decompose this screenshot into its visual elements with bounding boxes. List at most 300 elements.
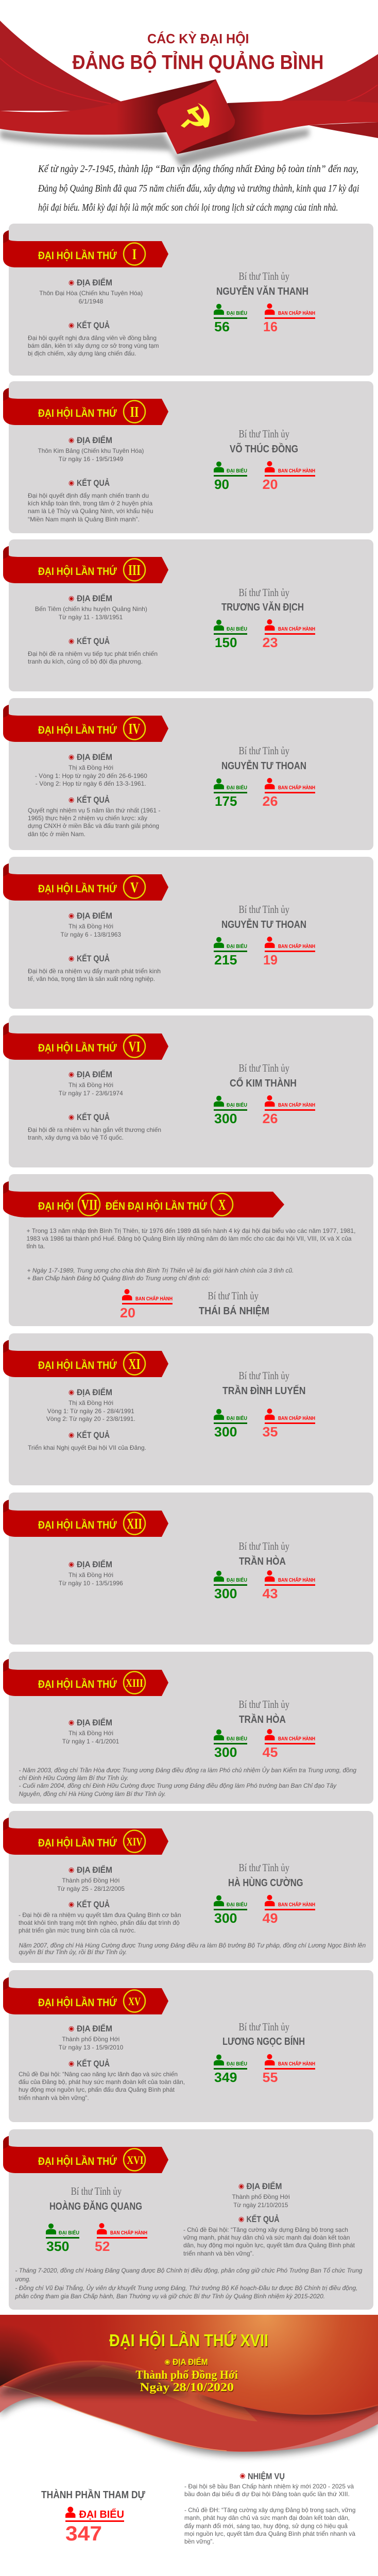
location [59, 1560, 123, 1587]
result [28, 954, 161, 982]
secretary: CỔ KIM THÀNH [230, 1077, 297, 1089]
location: Từ ngày 6 - 13/8/1963 [61, 931, 121, 938]
result: dân, huy động mọi nguồn lực, quyết tâm đưa Quảng Bình phát [183, 2242, 355, 2249]
location [35, 752, 147, 787]
result [28, 478, 153, 523]
result: kích khắp toàn tỉnh, trọng tâm ở 2 huyện phía [28, 499, 152, 507]
secretary [230, 428, 298, 455]
result: KẾT QUẢ [77, 320, 110, 330]
result: dựng CNXH ở miền Bắc và đấu tranh giải phóng [28, 822, 159, 829]
ribbon heading: II [130, 404, 139, 420]
location: ĐỊA ĐIỂM [77, 435, 112, 445]
tasks text: bền vững”. [184, 2538, 214, 2545]
heading: đại hội XVII [109, 2330, 268, 2394]
ribbon heading: ĐẠI HỘI LẦN THỨ [38, 1996, 117, 2009]
result: đấu của Đảng bộ, phát huy sức mạnh đoàn kết của toàn dân, [19, 2078, 185, 2086]
delegate stats: 90 [214, 477, 229, 492]
location: ĐỊA ĐIỂM [77, 1718, 112, 1727]
delegate stats: 26 [263, 1111, 278, 1126]
result: KẾT QUẢ [77, 1430, 110, 1440]
italic note: ương. [15, 2276, 31, 2283]
ribbon heading: ĐẠI HỘI [38, 1200, 74, 1212]
ribbon heading: ĐẠI HỘI LẦN THỨ [38, 1678, 117, 1690]
location: ĐỊA ĐIỂM [77, 1560, 112, 1569]
ribbon heading [3, 2136, 168, 2173]
result [28, 1112, 161, 1141]
italic note: chí Đinh Hữu Cường làm Bí thư Tỉnh ủy. [19, 1774, 129, 1782]
italic note: Năm 2007, đồng chí Hà Hùng Cường được Trung ương Đảng điều ra làm Bộ trưởng Bộ Tư pháp, đồng chí Lương Ngọc Bính lên [19, 1942, 366, 1949]
delegate stats: 43 [263, 1586, 278, 1601]
ribbon heading [3, 1023, 168, 1060]
location: Thị xã Đồng Hới [68, 1571, 113, 1579]
secretary [49, 2185, 142, 2212]
result [19, 2059, 185, 2102]
location: Từ ngày 25 - 28/12/2005 [57, 1885, 125, 1892]
delegate stats [214, 303, 315, 334]
delegate stats: ĐẠI BIỂU [227, 467, 247, 474]
result: KẾT QUẢ [77, 795, 110, 805]
attendees stat: THÀNH PHẦN THAM DỰ [41, 2489, 145, 2501]
ribbon heading [3, 1340, 168, 1377]
secretary: THÁI BÁ NHIỆM [199, 1304, 269, 1317]
location: Từ ngày 21/10/2015 [233, 2201, 288, 2209]
secretary [221, 586, 304, 613]
ribbon heading: ĐẾN ĐẠI HỘI LẦN THỨ [106, 1200, 207, 1212]
header ribbon with party emblem [0, 21, 378, 166]
secretary: TRẦN HÒA [239, 1713, 286, 1725]
panel: đại hội V [3, 857, 373, 1009]
delegate stats: ĐẠI BIỂU [227, 1577, 247, 1583]
location [57, 1865, 125, 1892]
delegate stats: 300 [214, 1586, 237, 1601]
secretary: HÀ HÙNG CƯỜNG [228, 1876, 303, 1889]
panel: đại hội IV [3, 698, 373, 850]
delegate stats: 35 [263, 1424, 278, 1439]
delegate stats: 19 [263, 952, 278, 968]
secretary: TRẦN HÒA [239, 1555, 286, 1567]
result: Đại hội đề ra nhiệm vụ tiếp tục phát triển chiến [28, 650, 158, 657]
delegate stats [214, 1895, 315, 1926]
ribbon heading: ĐẠI HỘI LẦN THỨ [38, 1519, 117, 1531]
result: KẾT QUẢ [77, 2059, 110, 2069]
location: Vòng 1: Từ ngày 26 - 28/4/1991 [47, 1408, 134, 1415]
ribbon heading: XIII [126, 1676, 143, 1689]
delegate stats: BAN CHẤP HÀNH [278, 2060, 315, 2067]
delegate stats [214, 1729, 315, 1760]
delegate stats: ĐẠI BIỂU [227, 1735, 247, 1742]
ribbon heading: ĐẠI HỘI LẦN THỨ [38, 883, 117, 895]
italic note: quyền Bí thư Tỉnh ủy, rồi Bí thư Tỉnh ủy. [19, 1948, 127, 1956]
location: ĐỊA ĐIỂM [77, 752, 112, 762]
italic note: - Cuối năm 2004, đồng chí Đinh Hữu Cường được Trung ương Đảng điều động làm Phó trưởng ban Ban Chỉ đạo Tây [19, 1782, 337, 1789]
location: ĐỊA ĐIỂM [77, 1865, 112, 1875]
panel: đại hội II [3, 381, 373, 533]
intro text [38, 163, 359, 213]
note text [27, 1227, 355, 1250]
location [38, 435, 144, 463]
location: Thành phố Đồng Hới [62, 1877, 119, 1884]
delegate stats: BAN CHẤP HÀNH [110, 2229, 147, 2236]
location: Thành phố Đồng Hới [232, 2193, 290, 2200]
result: - Đại hội đề ra nhiệm vụ quyết tâm đưa Quảng Bình cơ bản [19, 1911, 181, 1919]
secretary: LƯƠNG NGỌC BÍNH [222, 2036, 305, 2047]
delegate stats: BAN CHẤP HÀNH [278, 310, 315, 316]
result: triển nhanh và bền vững”. [183, 2250, 254, 2257]
ribbon heading [3, 546, 168, 583]
panel: đại hội XI [3, 1333, 373, 1485]
secretary: NGUYỄN TƯ THOAN [221, 919, 306, 930]
result: triển nhanh và bền vững”. [19, 2094, 89, 2102]
italic note: - Năm 2003, đồng chí Trần Hòa được Trung ương Đảng điều động ra làm Phó chủ nhiệm Ủy ban Kiểm tra Trung ương, đồng [19, 1766, 356, 1774]
ribbon heading [3, 863, 168, 901]
delegate stats: BAN CHẤP HÀNH [278, 784, 315, 791]
result: KẾT QUẢ [77, 954, 110, 963]
ribbon heading: XV [128, 1995, 141, 2008]
italic note: + Ban Chấp hành Đảng bộ Quảng Bình do Trung ương chỉ định có: [27, 1275, 210, 1282]
delegate stats [214, 1095, 315, 1126]
delegate stats: BAN CHẤP HÀNH [278, 1577, 315, 1583]
ribbon heading: XVI [127, 2154, 143, 2166]
ribbon heading [3, 1977, 168, 2014]
note text: + Trong 13 năm nhập tỉnh Bình Trị Thiên, từ 1976 đến 1989 đã tiến hành 4 kỳ đại hội đại biểu vào các năm 1977, 1981, [27, 1227, 355, 1234]
result: tranh, xây dựng và bảo vệ Tổ quốc. [28, 1134, 124, 1141]
executive committee stat: BAN CHẤP HÀNH [135, 1295, 173, 1302]
heading: đại hội XVII: Thành phố Đồng Hới [136, 2368, 238, 2381]
secretary [199, 1290, 269, 1317]
result: phát triển gần mức trung bình của cả nước. [19, 1927, 136, 1934]
location [62, 1718, 119, 1745]
location: Thị xã Đồng Hới [68, 923, 113, 930]
delegate stats: ĐẠI BIỂU [227, 2060, 247, 2067]
tasks text: bầu đoàn đại biểu đi dự Đại hội Đảng toàn quốc lần thứ XIII. [184, 2490, 350, 2498]
location: Từ ngày 11 - 13/8/1951 [59, 614, 123, 621]
result [28, 636, 158, 665]
executive committee stat: 20 [120, 1305, 135, 1320]
secretary: Bí thư Tỉnh ủy [239, 2021, 289, 2033]
delegate stats: 45 [263, 1744, 278, 1760]
secretary [222, 2021, 305, 2047]
delegate stats: BAN CHẤP HÀNH [278, 1901, 315, 1908]
delegate stats: ĐẠI BIỂU [227, 310, 247, 316]
location [46, 1387, 135, 1422]
ribbon heading [3, 1500, 168, 1537]
secretary: Bí thư Tỉnh ủy [239, 428, 289, 440]
result: - Chủ đề Đại hội: “Tăng cường xây dựng Đảng bộ trong sạch [183, 2226, 348, 2233]
location: 6/1/1948 [79, 298, 104, 305]
location: ĐỊA ĐIỂM [77, 278, 112, 287]
secretary: Bí thư Tỉnh ủy [239, 1540, 289, 1552]
result: “Miền Nam mạnh là Quảng Bình mạnh”. [28, 516, 140, 523]
delegate stats: 300 [214, 1111, 237, 1126]
delegate stats: 349 [214, 2070, 237, 2085]
ribbon heading: ĐẠI HỘI LẦN THỨ [38, 2155, 117, 2167]
location: Thôn Đại Hòa (Chiến khu Tuyên Hóa) [39, 290, 143, 297]
result [28, 320, 159, 357]
delegate stats: 55 [263, 2070, 278, 2085]
italic note: phân công tham gia Ban Chấp hành, Ban Thường vụ và giữ chức Bí thư Tỉnh ủy Quảng Bình nhiệm kỳ 2015-2020. [15, 2293, 325, 2300]
panel: đại hội XII [3, 1493, 373, 1645]
ribbon heading [3, 388, 168, 425]
delegate stats: ĐẠI BIỂU [227, 943, 247, 950]
location: Từ ngày 10 - 13/5/1996 [59, 1580, 123, 1587]
tasks text: - Chủ đề ĐH: “Tăng cường xây dựng Đảng bộ trong sạch, vững [184, 2506, 355, 2514]
delegate stats: 150 [215, 635, 237, 650]
secretary: TRƯƠNG VĂN ĐỊCH [221, 601, 304, 613]
location: Từ ngày 17 - 23/6/1974 [59, 1090, 123, 1097]
result: bám dân, kiên trì xây dựng cơ sở trong vùng tạm [28, 342, 159, 349]
panel: đại hội XVI [3, 2129, 373, 2310]
secretary [221, 744, 306, 772]
ribbon heading [3, 230, 168, 267]
delegate stats [46, 2223, 147, 2254]
tasks text [184, 2471, 355, 2545]
delegate stats: ĐẠI BIỂU [227, 1415, 247, 1421]
location: Bến Tiêm (chiến khu huyện Quảng Ninh) [35, 605, 147, 613]
ribbon heading: ĐẠI HỘI LẦN THỨ [38, 724, 117, 736]
delegate stats: ĐẠI BIỂU [227, 625, 247, 632]
italic note: - Tháng 7-2020, đồng chí Hoàng Đăng Quang được Bộ Chính trị điều động, phân công giữ chức Phó Trưởng Ban Tổ chức Trung [15, 2267, 363, 2274]
location: ĐỊA ĐIỂM [77, 911, 112, 921]
location [39, 278, 143, 305]
result: tranh du kích, củng cố bộ đội địa phương. [28, 658, 143, 665]
location: Vòng 2: Từ ngày 20 - 23/8/1991. [46, 1415, 135, 1422]
ribbon heading: ĐẠI HỘI LẦN THỨ [38, 1042, 117, 1054]
location: ĐỊA ĐIỂM [77, 2024, 112, 2033]
ribbon heading: ĐẠI HỘI LẦN THỨ [38, 249, 117, 262]
delegate stats: ĐẠI BIỂU [227, 1901, 247, 1908]
ribbon heading: ĐẠI HỘI LẦN THỨ [38, 565, 117, 578]
tasks text: - Đại hội sẽ bầu Ban Chấp hành nhiệm kỳ mới 2020 - 2025 và [184, 2483, 354, 2490]
italic note: Nguyên, đồng chí Hà Hùng Cường làm Bí thư Tỉnh ủy. [19, 1790, 166, 1798]
heading: đại hội XVII: ĐẠI HỘI LẦN THỨ XVII [109, 2330, 268, 2350]
italic note [15, 2267, 363, 2300]
result: Triển khai Nghị quyết Đại hội VII của Đảng. [28, 1444, 146, 1451]
secretary [230, 1062, 297, 1089]
secretary [216, 270, 308, 297]
location [59, 1070, 123, 1097]
result: tế, văn hóa, trọng tâm là sản xuất nông nghiệp. [28, 975, 155, 982]
executive committee stat [120, 1289, 173, 1320]
result: Đại hội đề ra nhiệm vụ hàn gắn vết thương chiến [28, 1126, 161, 1133]
result [19, 1900, 181, 1934]
location: Từ ngày 1 - 4/1/2001 [62, 1738, 119, 1745]
delegate stats [214, 937, 315, 968]
secretary: TRẦN ĐÌNH LUYẾN [222, 1385, 306, 1397]
result [28, 1430, 146, 1451]
ribbon heading: VI [129, 1039, 140, 1055]
delegate stats: 175 [215, 793, 237, 809]
ribbon heading: III [128, 562, 141, 579]
delegate stats: 215 [214, 952, 237, 968]
ribbon heading: ĐẠI HỘI LẦN THỨ [38, 1837, 117, 1849]
delegate stats: 300 [214, 1744, 237, 1760]
delegate stats [214, 619, 315, 650]
result: thoát khỏi tình trạng một tỉnh nghèo, phấn đấu đạt trình độ [19, 1919, 180, 1926]
delegate stats: BAN CHẤP HÀNH [278, 943, 315, 950]
delegate stats: BAN CHẤP HÀNH [278, 1735, 315, 1742]
location: Từ ngày 13 - 15/9/2010 [59, 2044, 124, 2051]
secretary: Bí thư Tỉnh ủy [71, 2185, 122, 2197]
location [59, 2024, 124, 2051]
delegate stats: 49 [263, 1910, 278, 1926]
location: ĐỊA ĐIỂM [246, 2181, 282, 2191]
panel: đại hội I [3, 224, 373, 376]
delegate stats: BAN CHẤP HÀNH [278, 1415, 315, 1421]
delegate stats: ĐẠI BIỂU [227, 1101, 247, 1108]
panel: đại hội XIV [3, 1811, 373, 1963]
ribbon heading [3, 1659, 168, 1696]
secretary: Bí thư Tỉnh ủy [239, 1062, 289, 1074]
delegate stats: 350 [46, 2239, 69, 2254]
secretary [228, 1861, 303, 1889]
ribbon heading: IV [129, 721, 141, 737]
ribbon heading: ĐẠI HỘI LẦN THỨ [38, 407, 117, 419]
delegate stats [214, 778, 315, 809]
result: vững mạnh, phát huy dân chủ và sức mạnh đại đoàn kết toàn [183, 2234, 350, 2241]
location: ĐỊA ĐIỂM [77, 1387, 112, 1397]
delegate stats [214, 2054, 315, 2085]
result [183, 2214, 355, 2257]
panel: đại hội VII đến X [3, 1174, 373, 1326]
ribbon heading: X [218, 1197, 226, 1213]
secretary [239, 1698, 289, 1725]
title: CÁC KỲ ĐẠI HỘI [147, 31, 249, 46]
secretary: Bí thư Tỉnh ủy [239, 586, 289, 599]
tasks text: mạnh, phát huy dân chủ và sức mạnh đại đoàn kết toàn dân, [184, 2514, 350, 2521]
secretary: Bí thư Tỉnh ủy [239, 270, 289, 282]
secretary: HOÀNG ĐĂNG QUANG [49, 2200, 142, 2212]
secretary: NGUYỄN VĂN THANH [216, 285, 308, 297]
italic note [19, 1766, 356, 1798]
secretary: Bí thư Tỉnh ủy [239, 1369, 289, 1382]
panel: đại hội III [3, 539, 373, 691]
delegate stats: 300 [214, 1424, 237, 1439]
secretary: Bí thư Tỉnh ủy [239, 903, 289, 916]
ribbon heading: ĐẠI HỘI LẦN THỨ [38, 1359, 117, 1371]
heading: đại hội XVII: Ngày 28/10/2020 [140, 2381, 234, 2394]
result: KẾT QUẢ [77, 636, 110, 646]
attendees stat [41, 2489, 145, 2545]
ribbon heading [3, 705, 168, 742]
secretary: Bí thư Tỉnh ủy [239, 744, 289, 757]
result: Quyết nghị nhiệm vụ 5 năm lần thứ nhất (1961 - [28, 807, 161, 814]
location: Thành phố Đồng Hới [62, 2036, 119, 2043]
note text: tỉnh ta. [27, 1243, 45, 1250]
delegate stats [214, 1409, 315, 1439]
secretary: Bí thư Tỉnh ủy [208, 1290, 259, 1302]
title: ĐẢNG BỘ TỈNH QUẢNG BÌNH [72, 50, 323, 74]
italic note: + Ngày 1-7-1989, Trung ương cho chia tỉnh Bình Trị Thiên về lại địa giới hành chính của 3 tỉnh cũ. [27, 1267, 294, 1274]
result: Đại hội quyết nghị đưa đảng viên về đồng bằng [28, 334, 157, 342]
note text: 1983 và 1986 tại thành phố Huế. Đảng bộ Quảng Bình lấy những năm đó làm mốc cho các đại hội VII, VIII, IX và X của [27, 1235, 352, 1242]
result: KẾT QUẢ [77, 1900, 110, 1909]
location: ĐỊA ĐIỂM [77, 1070, 112, 1079]
secretary: Bí thư Tỉnh ủy [239, 1861, 289, 1874]
italic note [19, 1942, 366, 1956]
result: KẾT QUẢ [77, 1112, 110, 1122]
italic note [27, 1267, 294, 1282]
attendees stat: ĐẠI BIỂU [79, 2509, 124, 2520]
location: Từ ngày 16 - 19/5/1949 [59, 455, 124, 463]
delegate stats: ĐẠI BIỂU [59, 2229, 79, 2236]
panel: đại hội XV [3, 1970, 373, 2122]
result: KẾT QUẢ [77, 478, 110, 488]
secretary: VÕ THÚC ĐỒNG [230, 443, 298, 455]
result: KẾT QUẢ [246, 2214, 280, 2224]
panel: đại hội VI [3, 1015, 373, 1167]
ribbon heading: XII [127, 1516, 142, 1532]
location: Thị xã Đồng Hới [68, 1399, 113, 1406]
ribbon heading: I [132, 246, 136, 263]
location [35, 594, 147, 621]
wave banner: top [0, 2315, 378, 2455]
location: Thôn Kim Bảng (Chiến khu Tuyên Hóa) [38, 447, 144, 454]
delegate stats: BAN CHẤP HÀNH [278, 467, 315, 474]
delegate stats: BAN CHẤP HÀNH [278, 625, 315, 632]
result: 1965) thực hiện 2 nhiệm vụ chiến lược: xây [28, 815, 147, 822]
result: Chủ đề Đại hội: “Nâng cao năng lực lãnh đạo và sức chiến [19, 2071, 178, 2078]
location: Thị xã Đồng Hới [68, 1730, 113, 1737]
ribbon heading: VII [81, 1197, 98, 1213]
result: dân tộc ở miền Nam. [28, 831, 85, 838]
delegate stats: ĐẠI BIỂU [227, 784, 247, 791]
secretary: NGUYỄN TƯ THOAN [221, 760, 306, 772]
ribbon heading [3, 1181, 284, 1217]
tasks text: đẩy mạnh đổi mới, sáng tạo, huy động, sử dụng có hiệu quả [184, 2522, 348, 2530]
delegate stats: 56 [214, 319, 230, 334]
ribbon heading [3, 1818, 168, 1855]
delegate stats [214, 1570, 315, 1601]
location: ĐỊA ĐIỂM [77, 594, 112, 603]
icon: hammer and sickle [181, 103, 210, 128]
secretary [221, 903, 306, 930]
ribbon heading: XI [129, 1356, 140, 1372]
result: Đại hội đề ra nhiệm vụ đẩy mạnh phát triển kinh [28, 968, 161, 975]
result: bị địch chiếm, xây dựng làng chiến đấu. [28, 350, 136, 357]
location: Thị xã Đồng Hới [68, 764, 113, 771]
delegate stats: BAN CHẤP HÀNH [278, 1101, 315, 1108]
result: nam là Lệ Thủy và Quảng Ninh, với khẩu hiệu [28, 507, 153, 515]
delegate stats: 300 [214, 1910, 237, 1926]
delegate stats: 16 [263, 319, 278, 334]
italic note: - Đồng chí Vũ Đại Thắng, Ủy viên dự khuyết Trung ương Đảng, Thứ trưởng Bộ Kế hoạch-Đầu tư được Bộ Chính trị điều động, [15, 2284, 357, 2292]
delegate stats: 26 [263, 793, 278, 809]
location: - Vòng 1: Họp từ ngày 20 đến 26-6-1960 [35, 772, 147, 779]
location: Thị xã Đồng Hới [68, 1081, 113, 1089]
secretary [222, 1369, 306, 1397]
location [232, 2181, 290, 2209]
tasks text: mọi nguồn lực, quyết tâm đưa Quảng Bình phát triển nhanh và [184, 2530, 355, 2537]
attendees stat: 347 [65, 2522, 102, 2545]
delegate stats: 52 [95, 2239, 110, 2254]
ribbon heading: XIV [127, 1835, 143, 1848]
location: - Vòng 2: Họp từ ngày 6 đến 13-3-1961. [36, 780, 146, 787]
result: Đại hội quyết định đẩy mạnh chiến tranh du [28, 492, 149, 499]
delegate stats [214, 461, 315, 492]
result [28, 795, 161, 838]
result: huy động mọi nguồn lực, phấn đấu đưa Quảng Bình phát [19, 2086, 175, 2093]
ribbon heading: V [130, 879, 139, 896]
delegate stats: 23 [263, 635, 278, 650]
secretary: Bí thư Tỉnh ủy [239, 1698, 289, 1710]
title [72, 31, 323, 74]
location [61, 911, 121, 938]
delegate stats: 20 [263, 477, 278, 492]
tasks text: NHIỆM VỤ [248, 2471, 285, 2481]
heading: đại hội XVII: ĐỊA ĐIỂM [173, 2357, 208, 2367]
panel: đại hội XIII [3, 1652, 373, 1804]
secretary [239, 1540, 289, 1567]
